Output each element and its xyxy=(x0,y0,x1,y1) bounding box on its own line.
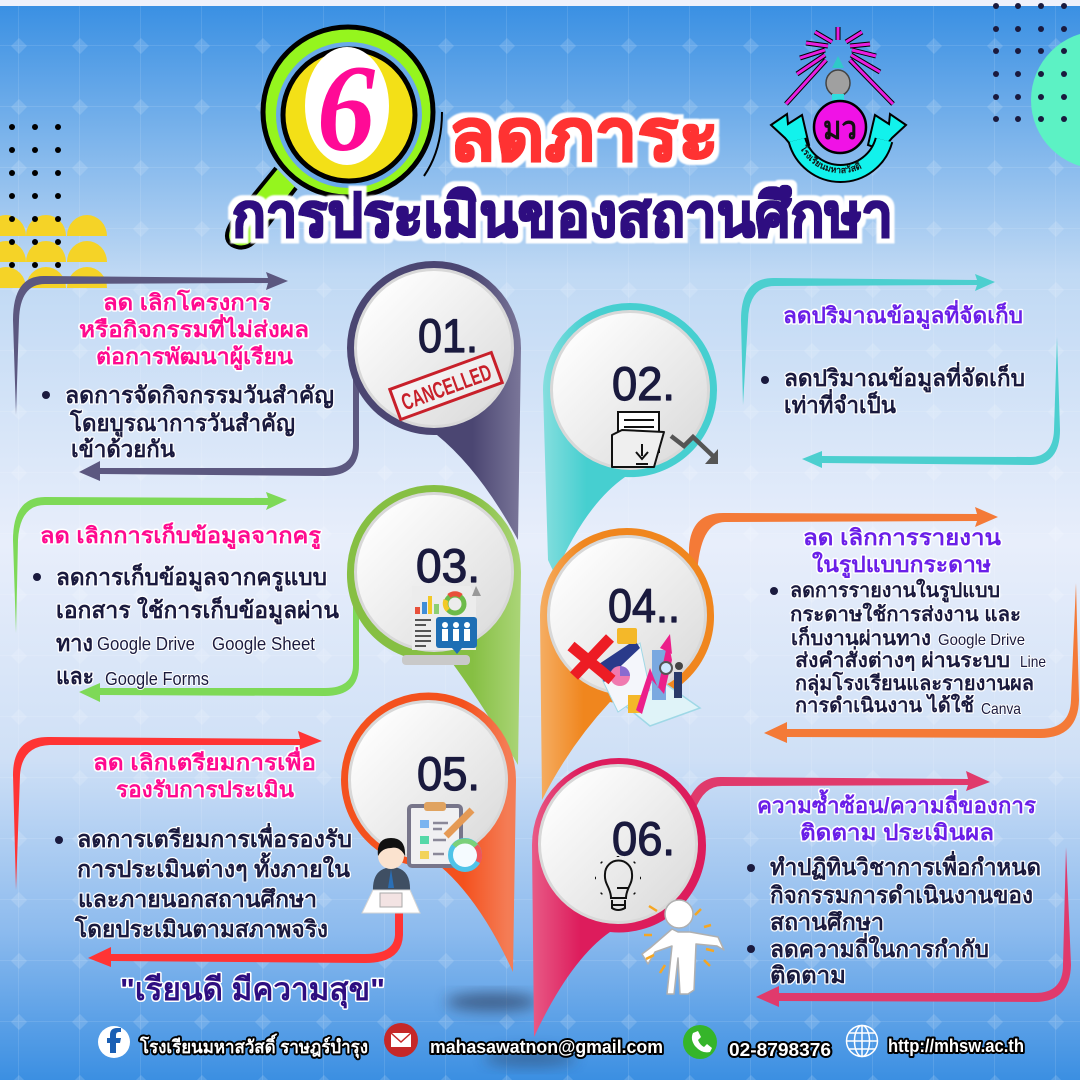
heading: ลด เลิกการรายงาน xyxy=(803,525,1001,550)
bullet list xyxy=(747,850,1041,988)
bullet list: โดยประเมินตามสภาพจริง xyxy=(74,915,328,942)
icon: teacher at desk xyxy=(362,838,420,913)
phone number: 02-8798376 xyxy=(729,1040,831,1060)
heading xyxy=(93,746,316,802)
bullet list xyxy=(42,382,334,462)
icon: magnifying glass with number 6: 6 xyxy=(317,40,375,177)
icon: globe xyxy=(846,1025,878,1057)
icon: cancelled stamp: CANCELLED xyxy=(398,359,495,415)
heading: ในรูปแบบกระดาษ xyxy=(812,551,992,579)
pin 02: 02. xyxy=(612,357,675,410)
bullet list: ลดการเก็บข้อมูลจากครูแบบ xyxy=(56,562,327,592)
icon: document folder with down trend xyxy=(612,412,718,467)
website: http://mhsw.ac.th xyxy=(888,1036,1024,1056)
pin 04: 04.. xyxy=(608,579,680,632)
bullet list: การดำเนินงาน ได้ใช้ xyxy=(795,693,974,717)
panel 06 text xyxy=(747,789,1041,988)
heading: ติดตาม ประเมินผล xyxy=(800,820,994,845)
heading: ลด เลิกเตรียมการเพื่อ xyxy=(93,746,316,775)
icon: clipboard checklist xyxy=(409,802,480,870)
panel 04 text xyxy=(770,525,1046,718)
bullet list: การประเมินต่างๆ ทั้งภายใน xyxy=(77,852,350,882)
bullet list xyxy=(33,562,339,689)
arrows: panel 06 xyxy=(685,771,1071,1007)
icon: cancelled stamp xyxy=(390,352,502,420)
bullet list xyxy=(770,578,1046,718)
bullet list: สถานศึกษา xyxy=(770,909,884,935)
slogan: "เรียนดี มีความสุข" xyxy=(120,972,385,1009)
arrows: panel 04 xyxy=(689,507,1079,743)
emblem ribbon xyxy=(771,114,906,173)
pin 02 xyxy=(543,303,718,575)
footer: contact bar xyxy=(98,1023,1024,1060)
title: การประเมินของสถานศึกษา xyxy=(232,182,893,249)
heading xyxy=(79,289,309,371)
bullet list xyxy=(55,822,352,942)
icon: magnifying glass with number 6 xyxy=(227,27,442,248)
arrows: panel 03 xyxy=(13,492,359,702)
icon: shrugging figure xyxy=(642,900,724,994)
bullet list: Google Drive xyxy=(97,634,195,654)
bullet list: เท่าที่จำเป็น xyxy=(784,388,896,418)
title: ลดภาระ xyxy=(449,96,719,176)
arrows: panel 01 xyxy=(13,272,359,481)
pin 05 xyxy=(341,692,516,972)
bullet list: Google Sheet xyxy=(212,634,315,654)
heading: รองรับการประเมิน xyxy=(116,777,294,802)
emblem crown xyxy=(826,56,850,102)
bullet list: เข้าด้วยกัน xyxy=(71,436,175,462)
bullet list: ลดการจัดกิจกรรมวันสำคัญ xyxy=(65,382,334,409)
panel 05 text xyxy=(55,746,352,942)
bullet list: ทาง xyxy=(56,630,93,656)
bullet list: Canva xyxy=(981,701,1021,718)
arrows: panel 02 xyxy=(741,274,1060,468)
bullet list xyxy=(761,361,1025,418)
arrows: panel 05 xyxy=(13,731,403,967)
panel 02 text xyxy=(761,299,1025,418)
pin 04 xyxy=(540,528,714,800)
heading: ลด เลิกการเก็บข้อมูลจากครู xyxy=(40,521,321,550)
bullet list: ทำปฏิทินวิชาการเพื่อกำหนด xyxy=(770,850,1041,880)
heading xyxy=(803,525,1001,579)
bullet list: กลุ่มโรงเรียนและรายงานผล xyxy=(795,671,1034,696)
heading: ต่อการพัฒนาผู้เรียน xyxy=(96,344,293,371)
pin 01 xyxy=(347,261,521,540)
pin 05: 05. xyxy=(417,747,480,800)
icon: light bulb xyxy=(595,856,641,910)
bullet list: Google Forms xyxy=(105,669,209,689)
decoration: yellow half circles xyxy=(0,215,107,288)
heading: ความซ้ำซ้อน/ความถี่ของการ xyxy=(757,789,1036,818)
bullet list: ลดการรายงานในรูปแบบ xyxy=(790,578,1000,604)
email address: mahasawatnon@gmail.com xyxy=(430,1037,663,1057)
bullet list: กิจกรรมการดำเนินงานของ xyxy=(770,882,1033,908)
icon: school emblem xyxy=(770,27,908,183)
heading: หรือกิจกรรมที่ไม่ส่งผล xyxy=(79,313,309,342)
bullet list: ลดปริมาณข้อมูลที่จัดเก็บ xyxy=(784,361,1025,393)
bullet list: เอกสาร ใช้การเก็บข้อมูลผ่าน xyxy=(56,595,339,625)
decoration: left dot grid xyxy=(9,124,61,268)
bullet list: Google Drive xyxy=(938,632,1025,649)
facebook name: โรงเรียนมหาสวัสดิ์ ราษฎร์บำรุง xyxy=(139,1033,368,1059)
decoration: right dot grid xyxy=(993,3,1067,122)
icon: facebook xyxy=(98,1026,130,1058)
bullet list: กระดาษใช้การส่งงาน และ xyxy=(790,602,1021,626)
pin 03: 03. xyxy=(416,539,480,592)
icon: school emblem: มว xyxy=(823,110,857,146)
emblem rays xyxy=(786,27,893,104)
heading: ลดปริมาณข้อมูลที่จัดเก็บ xyxy=(783,299,1023,330)
heading xyxy=(757,789,1036,845)
bullet list: Line xyxy=(1020,654,1046,671)
bullet list: ลดการเตรียมการเพื่อรองรับ xyxy=(77,822,352,852)
panel 03 text xyxy=(33,521,339,689)
icon: report scroll with charts and people xyxy=(402,586,481,665)
title xyxy=(232,96,893,249)
bullet list: ส่งคำสั่งต่างๆ ผ่านระบบ xyxy=(795,645,1010,672)
icon: school emblem: โรงเรียนมหาสวัสดิ์ xyxy=(801,144,862,174)
icon: email xyxy=(384,1023,418,1057)
panel 01 text xyxy=(42,289,334,462)
pin 03 xyxy=(347,485,521,765)
bullet list: และ xyxy=(56,663,94,689)
bullet list: เก็บงานผ่านทาง xyxy=(791,625,931,650)
bullet list: และภายนอกสถานศึกษา xyxy=(78,886,317,912)
bullet list: ลดความถี่ในการกำกับ xyxy=(770,932,989,962)
pin 01: 01. xyxy=(418,309,478,362)
pin 06 xyxy=(532,758,724,1037)
heading: ลด เลิกโครงการ xyxy=(103,289,271,315)
icon: phone xyxy=(683,1025,717,1059)
pin shadows xyxy=(446,993,576,1067)
pin 06: 06. xyxy=(612,812,675,865)
bullet list: โดยบูรณาการวันสำคัญ xyxy=(69,409,295,438)
decoration: mint circle xyxy=(1031,31,1080,169)
icon: analytics dashboard with red cross xyxy=(571,628,700,726)
bullet list: ติดตาม xyxy=(770,962,846,988)
